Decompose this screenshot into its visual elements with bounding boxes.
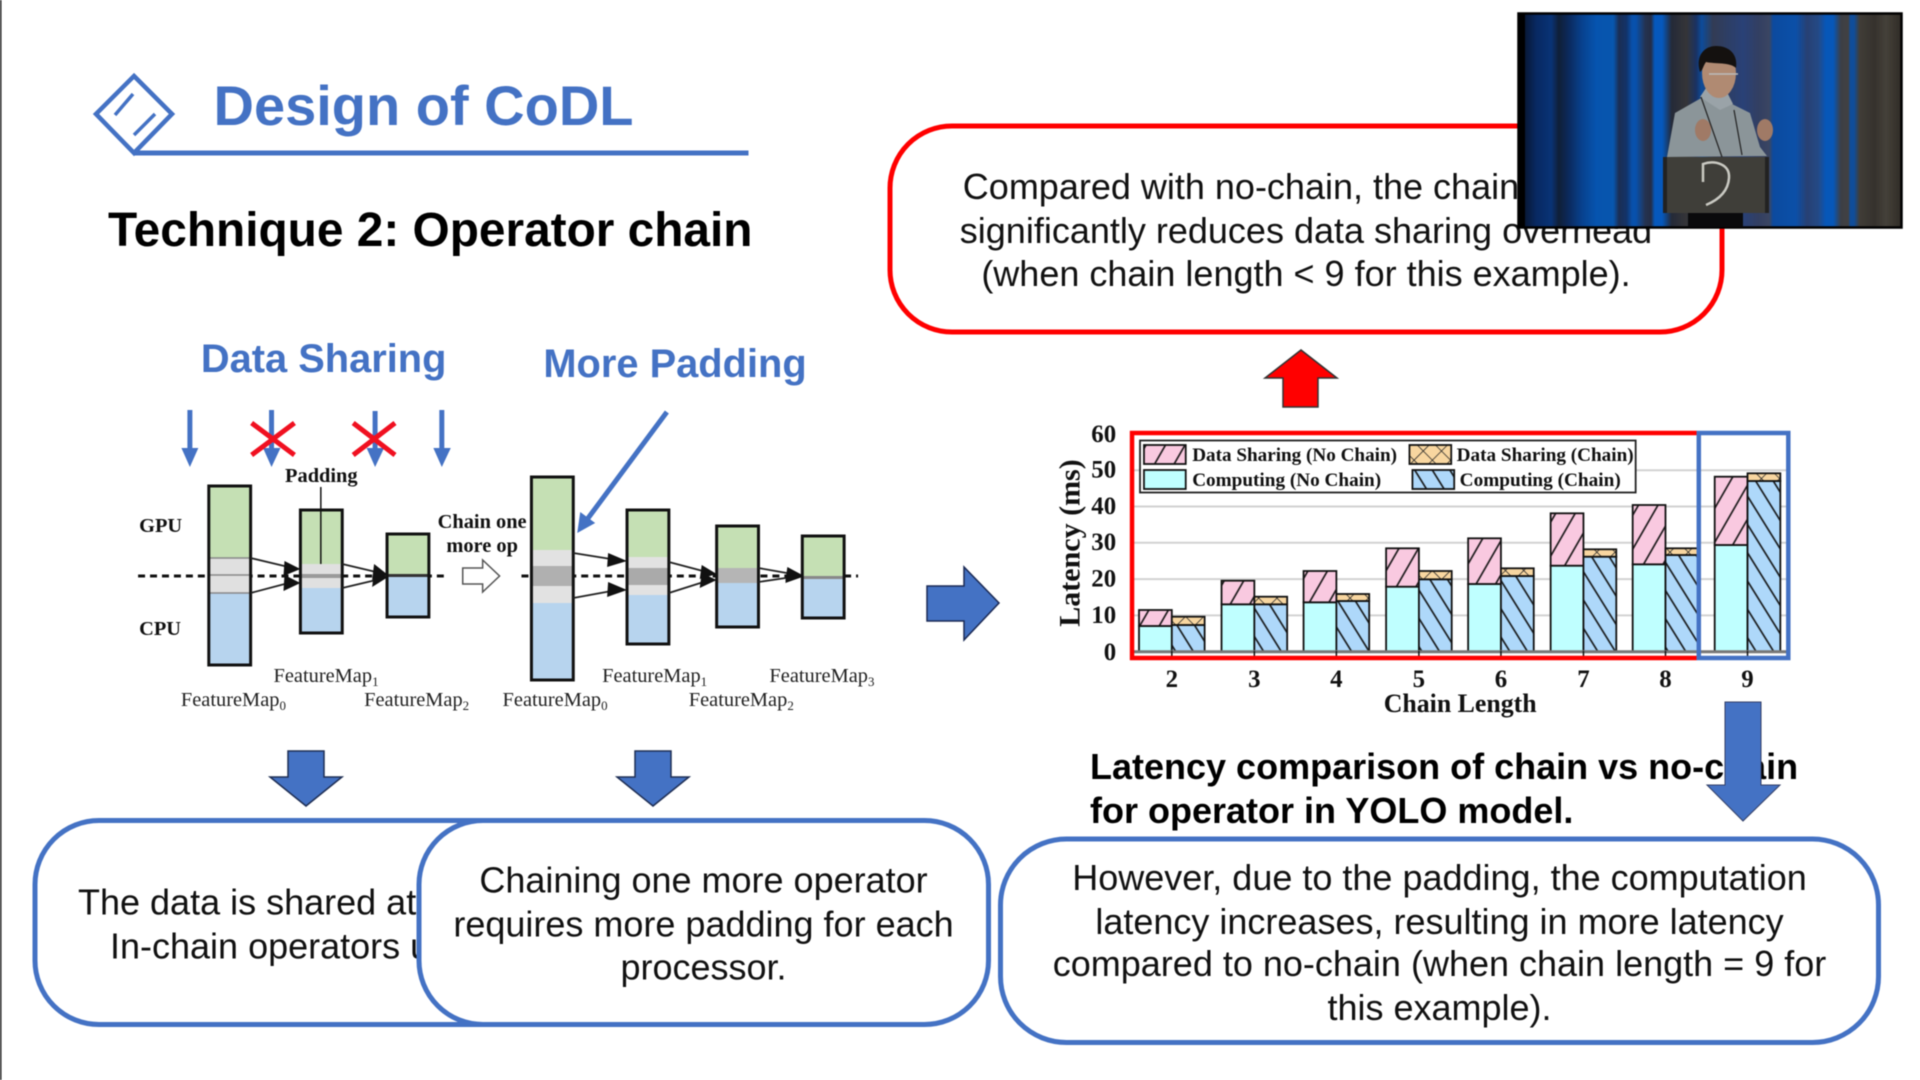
x axis labels: 8: [1659, 666, 1672, 693]
labels: diagram text: 0: [279, 698, 286, 713]
feature map 2: [717, 526, 758, 627]
slide left edge: [0, 0, 2, 1080]
labels: diagram text: FeatureMap: [602, 665, 701, 687]
labels: diagram text: FeatureMap: [364, 689, 463, 711]
bars: chain length 6: [1468, 538, 1534, 652]
labels: diagram text: Padding: [285, 465, 358, 487]
x axis labels: 2: [1166, 666, 1178, 693]
arrows: data sharing markers: [181, 410, 451, 467]
highlight: chain length 9: [1699, 433, 1788, 658]
feature map 0: [531, 477, 573, 680]
labels: diagram text: 0: [601, 698, 608, 713]
labels: diagram text: FeatureMap: [503, 689, 601, 711]
callout: more padding note: [419, 820, 988, 1024]
arrow: padding pointer: [577, 412, 667, 533]
bar chart: latency vs chain length: [1053, 421, 1788, 718]
callout text: [960, 166, 1652, 294]
labels: diagram text: CPU: [139, 618, 181, 640]
y axis labels: 30: [1091, 529, 1116, 556]
x axis labels: 4: [1330, 666, 1343, 693]
legend: Computing (No Chain): [1192, 470, 1381, 491]
speaker: [1667, 46, 1773, 157]
feature map 3: [802, 536, 844, 618]
bars: chain length 3: [1222, 581, 1287, 652]
x axis labels: 3: [1248, 666, 1261, 693]
y axis labels: 50: [1091, 456, 1116, 484]
legend: Data Sharing (No Chain): [1192, 445, 1397, 466]
labels: diagram text: 1: [372, 674, 379, 689]
heading: more padding: More Padding: [543, 342, 807, 386]
x axis labels: 7: [1577, 666, 1590, 693]
callout text: requires more padding for each: [453, 904, 954, 944]
title text: Design of CoDL: [214, 74, 633, 137]
callout text: (when chain length < 9 for this example).: [981, 253, 1631, 294]
callout text: In-chain operators u: [110, 926, 430, 966]
labels: diagram text: 2: [463, 698, 469, 713]
callout text: this example).: [1327, 987, 1552, 1028]
title underline: [134, 150, 748, 156]
labels: diagram text: FeatureMap: [689, 689, 787, 711]
feature map 2: [387, 534, 429, 617]
y axis labels: 40: [1091, 493, 1116, 520]
arrow: down to data sharing note: [270, 751, 342, 806]
bars: chain length 5: [1386, 548, 1452, 652]
chart caption: Latency comparison of chain vs no-chain: [1090, 746, 1798, 787]
title: Design of CoDL: [96, 74, 748, 156]
callout text: Chaining one more operator: [479, 860, 928, 900]
y axis title: Latency (ms): [1053, 459, 1086, 627]
labels: diagram text: [139, 465, 874, 713]
labels: diagram text: GPU: [139, 515, 182, 537]
arrows: right data flow: [573, 553, 802, 598]
callout: data sharing note: [35, 820, 675, 1024]
arrow: chart down to callout: [1707, 702, 1780, 821]
feature map 1: [300, 487, 342, 633]
subtitle: technique: Technique 2: Operator chain: [108, 204, 752, 257]
callout text: [453, 860, 954, 988]
y axis labels: 10: [1091, 602, 1116, 629]
arrow: diagram to chart: [927, 567, 999, 640]
callout: no-chain comparison: [890, 126, 1722, 332]
y axis labels: 60: [1091, 421, 1116, 448]
x axis labels: 9: [1741, 666, 1754, 693]
icon: red crosses: [252, 423, 395, 455]
labels: diagram text: FeatureMap: [769, 665, 868, 687]
labels: diagram text: FeatureMap: [274, 665, 372, 687]
bars: chain length 9: [1715, 473, 1780, 652]
left stack: feature maps: [209, 486, 429, 665]
dashed split lines: [138, 574, 858, 578]
labels: diagram text: 2: [787, 698, 794, 713]
arrows: left data flow: [251, 558, 388, 593]
labels: diagram text: FeatureMap: [181, 689, 279, 711]
callout text: significantly reduces data sharing overhead: [960, 210, 1652, 251]
callout text: Compared with no-chain, the chain method: [963, 166, 1649, 207]
icon: diamond logo: [96, 76, 172, 153]
callout text: However, due to the padding, the computation: [1072, 857, 1807, 898]
right stack: feature maps: [531, 477, 844, 680]
callout text: [1053, 857, 1826, 1028]
bars: chain length 2: [1139, 610, 1205, 652]
x axis labels: 5: [1413, 666, 1425, 693]
labels: diagram text: more op: [446, 535, 518, 557]
legend: Data Sharing (Chain): [1457, 445, 1634, 466]
labels: diagram text: Chain one: [438, 511, 527, 533]
arrow: down to padding note: [617, 751, 689, 806]
labels: diagram text: 1: [701, 674, 707, 689]
x axis labels: 6: [1495, 666, 1507, 693]
callout: padding latency: [1000, 839, 1878, 1042]
panel: operator chain diagram: [138, 337, 874, 713]
arrow: chain one more op (hollow): [463, 560, 500, 592]
x axis labels: [1166, 666, 1754, 693]
heading: data sharing: Data Sharing: [201, 337, 446, 381]
callout text: [78, 882, 430, 966]
highlight: chain length below 9: [1132, 433, 1697, 658]
y axis labels: 20: [1091, 565, 1116, 593]
chart caption: for operator in YOLO model.: [1090, 790, 1573, 831]
x axis baseline and ticks: [1131, 650, 1788, 653]
bars: chain length 4: [1304, 571, 1369, 652]
legend: Computing (Chain): [1460, 470, 1621, 491]
feature map 1: [627, 510, 669, 644]
labels: diagram text: 3: [868, 674, 874, 689]
feature map 0: [209, 486, 251, 665]
podium: [1663, 157, 1769, 227]
bars: chain length 7: [1551, 513, 1616, 652]
legend: [1140, 440, 1636, 492]
callout text: compared to no-chain (when chain length = 9 for: [1053, 943, 1826, 984]
callout text: latency increases, resulting in more latency: [1095, 901, 1784, 942]
x axis title: Chain Length: [1384, 689, 1537, 718]
callout text: The data is shared at: [78, 882, 416, 922]
bars: chain length 8: [1633, 505, 1698, 652]
y axis labels: [1091, 421, 1116, 666]
grid lines: [1131, 470, 1788, 615]
callout text: processor.: [620, 946, 787, 988]
webcam: speaker at podium: [1518, 14, 1902, 228]
y axis labels: 0: [1104, 639, 1116, 666]
chart caption: [1090, 746, 1798, 831]
arrow: chart up to callout: [1265, 350, 1337, 407]
